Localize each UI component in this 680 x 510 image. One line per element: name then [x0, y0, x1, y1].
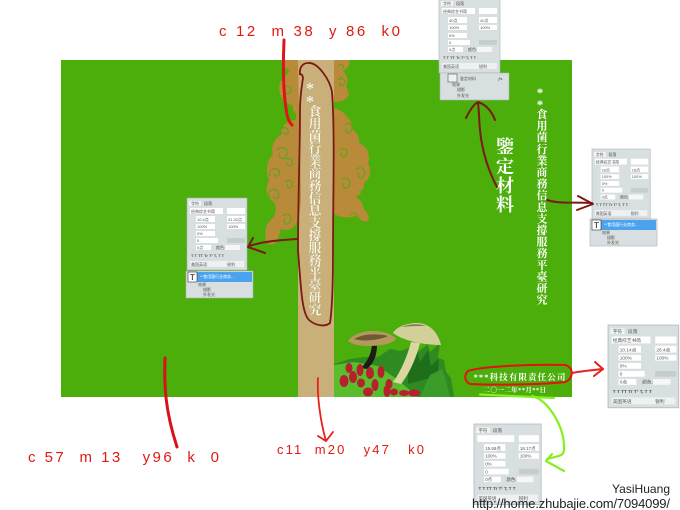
panel: layers top [440, 73, 509, 100]
panel: character panel right: 颜色: [620, 194, 629, 199]
heading: 鑒定材料: 鑒 [496, 136, 514, 157]
right vertical title: * [537, 97, 543, 112]
label: green CMYK: c 57 m 13 y96 k 0 [28, 449, 219, 466]
right vertical title: 食 [536, 107, 548, 121]
heading: 鑒定材料: 定 [496, 157, 514, 177]
panel: character panel bottom: T T TT Tr T¹ T, T T [478, 486, 516, 491]
right vertical title: 支 [536, 211, 548, 225]
annotation line: gold colour callout [283, 40, 292, 125]
panel: character panel top: 0 [449, 40, 452, 45]
panel: character panel bottom right: 锐利 [655, 398, 665, 405]
right vertical title: 商 [536, 166, 548, 179]
panel: character panel bottom: 锐利 [519, 495, 528, 502]
panel: character panel left: 经典综艺书简 [191, 208, 215, 214]
right vertical title: 息 [536, 200, 548, 214]
panel: character panel bottom: 0点 [485, 477, 493, 483]
panel: character panel left: T T TT Tr T¹ T, T T [191, 253, 225, 258]
spine title, vertical: 用 [308, 116, 322, 131]
panel: character panel bottom: 100% [485, 454, 497, 459]
right vertical title: 撐 [536, 223, 548, 237]
panel: character panel top: 美国英语 [443, 63, 459, 69]
spine title, vertical: * [306, 79, 314, 98]
annotation: green underline and arrow to bottom panel [480, 394, 564, 471]
spine title, vertical: 行 [308, 141, 322, 156]
panel: layers left [186, 271, 253, 298]
panel: character panel bottom right [608, 325, 679, 408]
panel: layers right: T [594, 221, 599, 230]
panel: character panel right: 16点 [602, 167, 610, 172]
panel: layers left: **食用菌行业商务... [200, 273, 234, 279]
panel: layers top: 效果 [452, 81, 460, 87]
ornament: right cloud scroll [334, 60, 370, 223]
spine title, vertical: 息 [308, 203, 322, 218]
right vertical title: 菌 [536, 130, 548, 144]
right vertical title: 行 [536, 142, 548, 156]
arrow: company name to bottom-right panel [572, 362, 603, 376]
spine title, vertical: 平 [308, 265, 322, 280]
panel: character panel bottom: 颜色: [506, 476, 517, 483]
spine title, vertical: * [306, 92, 314, 111]
watermark [472, 482, 670, 510]
panel: layers right: 效果 [602, 229, 610, 235]
panel: layers left: T [190, 273, 195, 282]
right vertical title: 信 [536, 188, 548, 202]
panel: character panel top: 0点 [449, 46, 455, 52]
panel: layers right [590, 219, 657, 246]
arrow: spine to left panel [248, 238, 298, 253]
panel: character panel bottom right: 颜色: [642, 379, 653, 386]
spine title, vertical: 菌 [308, 129, 322, 144]
panel: character panel bottom right: 10.14点 [620, 348, 637, 353]
panel: character panel right: 经典综艺书简 [596, 160, 619, 165]
panel: character panel top: 经典综艺书简 [443, 8, 467, 14]
panel: character panel right: 0% [602, 181, 608, 186]
panel: character panel top: 40点 [449, 17, 457, 23]
panel: character panel right: 16点 [632, 167, 640, 172]
panel: layers right: **食用菌行业商务... [604, 221, 638, 227]
panel: character panel bottom right: 字符 [613, 328, 622, 335]
panel: character panel right: 100% [632, 174, 642, 179]
arrow: 鉴定材料 to top panel [466, 102, 497, 187]
right vertical title: 臺 [536, 269, 548, 283]
panel: character panel top: 字符 [443, 0, 451, 6]
panel: layers left: 外发光 [203, 291, 215, 297]
right vertical title: 平 [536, 258, 548, 272]
right vertical title: 用 [536, 119, 548, 133]
right vertical title: 服 [536, 235, 548, 249]
right vertical title: 業 [536, 153, 548, 167]
spine title, vertical: 撐 [308, 228, 322, 243]
panel: character panel left: 锐利 [227, 261, 235, 267]
panel: character panel bottom: 美国英语 [478, 495, 497, 502]
panel: character panel bottom: 18.17点 [520, 446, 536, 452]
company name: ***科技有限责任公司 [474, 372, 566, 382]
right vertical title: 務 [536, 246, 548, 260]
panel: character panel left: 0 [197, 238, 200, 243]
panel: layers left: 描影 [203, 286, 211, 292]
annotation: red ellipse around company name [465, 365, 572, 385]
cover: tan spine strip [298, 60, 334, 397]
right vertical title: 務 [536, 177, 548, 191]
panel: character panel bottom right: 0 [620, 372, 623, 377]
panel: character panel bottom: 0 [485, 469, 488, 474]
panel: character panel bottom [474, 424, 541, 505]
heading: 鑒定材料 [496, 136, 514, 215]
watermark: YasiHuang [612, 482, 670, 496]
panel: character panel bottom right: 段落 [628, 328, 638, 335]
panel: character panel left: 0点 [197, 244, 203, 250]
right vertical title: * [537, 85, 543, 100]
panel: character panel top: 100% [480, 25, 491, 30]
panel: layers top: ƒx [498, 76, 503, 81]
spine title, vertical: 務 [308, 253, 322, 268]
panel: character panel right: 0点 [602, 194, 608, 199]
ornament: left cloud scroll [265, 60, 301, 251]
right vertical title [536, 85, 548, 307]
panel: character panel top: 锐利 [479, 63, 487, 69]
panel: character panel right: 字符 [596, 152, 604, 157]
panel: character panel right: 锐利 [631, 211, 639, 216]
annotation line: tan colour callout [318, 378, 333, 441]
panel: character panel left: 字符 [191, 200, 199, 206]
panel: character panel top: T T TT Tr T¹ T, T T [443, 55, 477, 60]
panel: character panel bottom right: 26.4点 [656, 348, 671, 353]
panel: character panel right [592, 149, 650, 219]
right vertical title: 研 [536, 282, 548, 295]
panel: character panel bottom right: 100% [620, 356, 632, 360]
panel: character panel bottom: 段落 [493, 427, 503, 434]
panel: character panel bottom right: 经典综艺书简 [613, 337, 641, 344]
illustration: mushrooms and moss [334, 323, 454, 397]
spine title, vertical: 信 [308, 191, 322, 206]
panel: layers right: 外发光 [607, 239, 619, 245]
panel: character panel bottom right: 0% [620, 364, 627, 369]
panel: character panel left: 10.4点 [197, 216, 209, 222]
cover: green background [61, 60, 572, 397]
panel: character panel left [187, 198, 247, 270]
panel: character panel top: 颜色: [468, 46, 477, 52]
panel: character panel bottom right: 0点 [620, 380, 627, 386]
panel: character panel right: 段落 [608, 152, 616, 157]
panel: character panel left: 美国英语 [191, 261, 207, 267]
panel: character panel bottom: 0% [485, 461, 492, 466]
spine title, vertical [306, 79, 322, 317]
panel: character panel left: 100% [197, 224, 208, 229]
heading: 鑒定材料: 料 [496, 195, 514, 215]
panel: layers top: 鉴定材料 [460, 75, 476, 81]
panel: character panel bottom right: 美国英语 [613, 398, 632, 405]
spine title, vertical: 臺 [308, 278, 322, 293]
spine title, vertical: 研 [308, 290, 322, 305]
panel: character panel right: T T TT Tr T¹ T, T T [596, 202, 629, 207]
panel: layers top: 外发光 [457, 92, 469, 98]
panel: character panel bottom right: T T TT Tr T¹ T, T T [613, 389, 652, 394]
panel: character panel left: 21.32点 [228, 216, 242, 222]
panel: character panel top: 100% [449, 25, 460, 30]
date: 二〇一二年**月**日 [484, 385, 546, 394]
heading: 鑒定材料: 材 [496, 176, 514, 196]
panel: layers right: 描影 [607, 234, 615, 240]
spine title, vertical: 食 [308, 104, 322, 119]
panel: character panel bottom: 15.68点 [485, 446, 501, 452]
spine title, vertical: 業 [308, 154, 322, 169]
arrow: vertical title to right panel [547, 196, 593, 210]
panel: layers top: 描影 [457, 86, 465, 92]
panel: character panel bottom: 100% [520, 454, 531, 459]
panel: character panel top: 40点 [480, 17, 488, 23]
panel: character panel left: 段落 [204, 200, 212, 206]
panel: character panel bottom right: 100% [656, 356, 668, 360]
panel: character panel right: 美国英语 [596, 211, 612, 216]
right vertical title: 究 [536, 294, 548, 307]
panel: character panel top: 0% [449, 33, 455, 38]
panel: layers left: 效果 [198, 281, 206, 287]
annotation line: green colour callout [165, 358, 177, 447]
panel: character panel left: 0% [197, 231, 203, 236]
spine title, vertical: 服 [308, 240, 322, 255]
panel: character panel right: 100% [602, 174, 612, 179]
panel: character panel bottom: 字符 [478, 427, 488, 434]
spine title, vertical: 究 [308, 302, 322, 317]
panel: character panel top [439, 0, 500, 73]
panel: character panel left: 100% [228, 224, 239, 229]
label: gold CMYK: c 12 m 38 y 86 k0 [219, 23, 400, 40]
spine title, vertical: 支 [308, 216, 322, 231]
spine title, vertical: 務 [308, 178, 322, 193]
panel: character panel right: 0 [602, 188, 604, 193]
label: tan CMYK: c11 m20 y47 k0 [277, 442, 424, 457]
panel: character panel left: 颜色: [216, 244, 225, 250]
spine title, vertical: 商 [308, 166, 322, 181]
panel: character panel top: 段落 [456, 0, 464, 6]
annotation: dark red outline around spine title [298, 63, 334, 325]
